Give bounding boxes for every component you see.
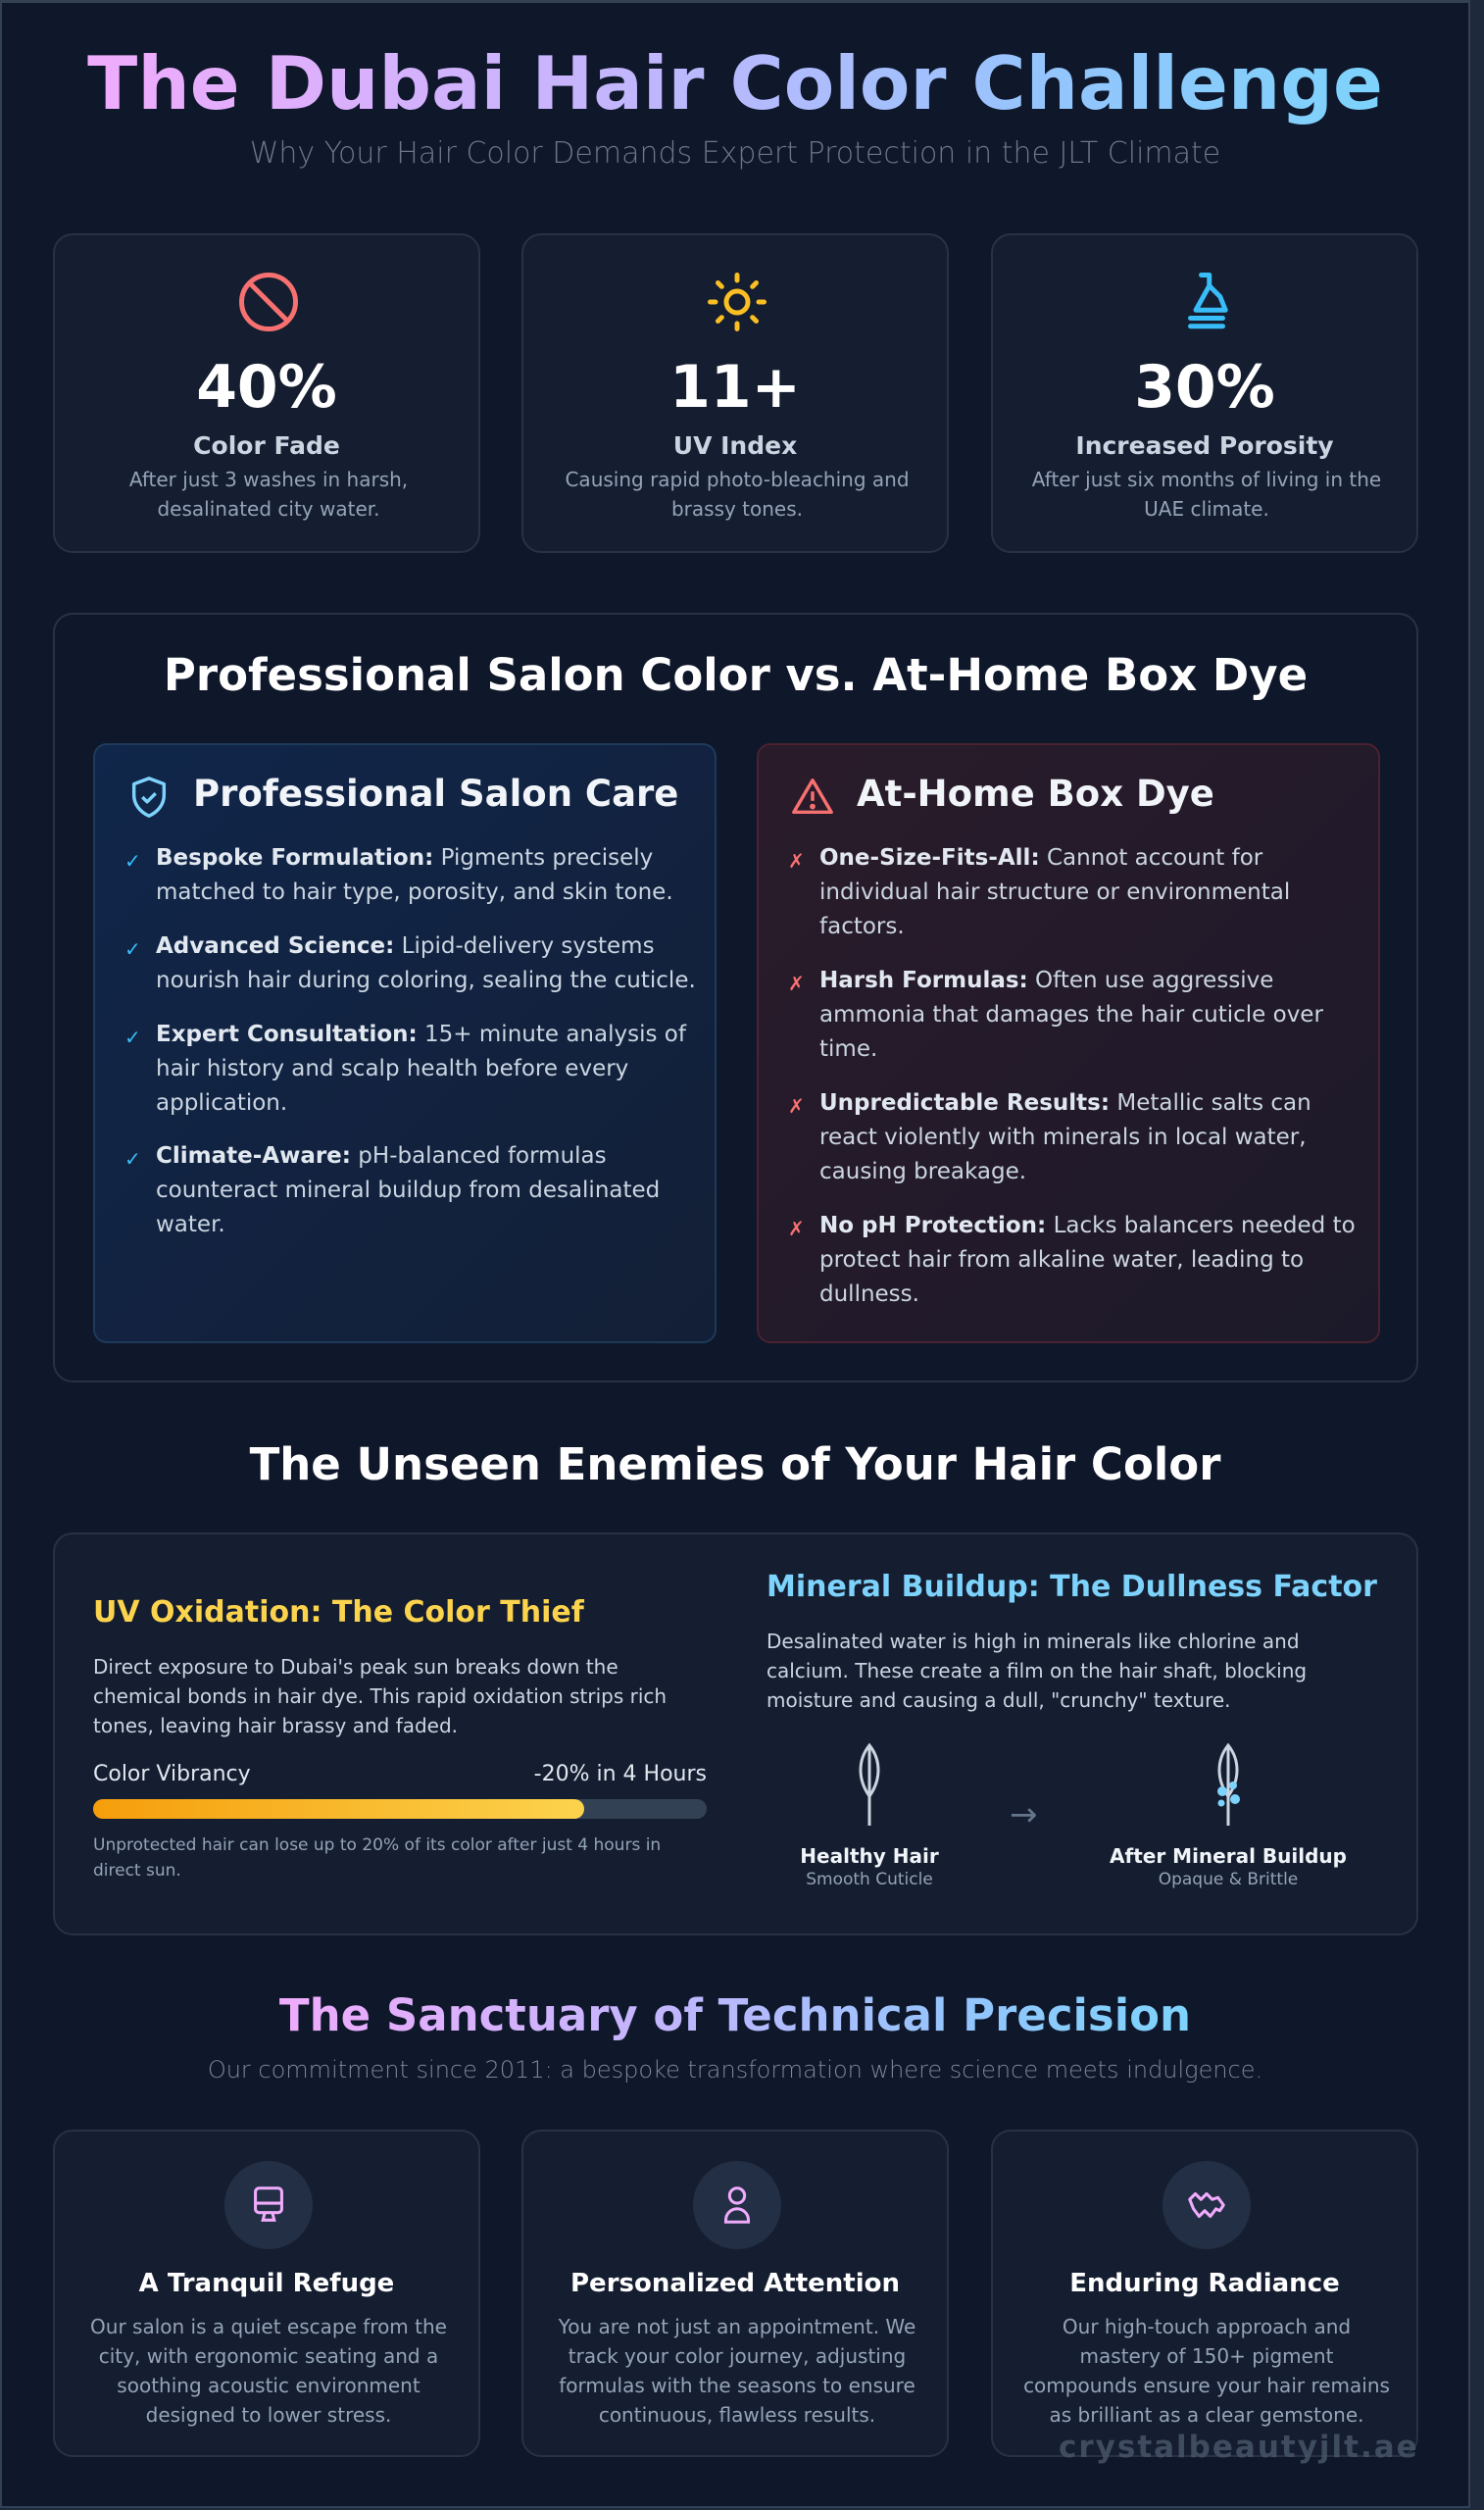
arrow: → <box>1010 1795 1037 1834</box>
panel: comparison <box>53 613 1418 1382</box>
list items: Climate-Aware: pH-balanced formulas counteract mineral buildup from desalinated water. <box>156 1143 660 1237</box>
stat card: porosity <box>991 233 1418 553</box>
label: healthy hair: Smooth Cuticle <box>806 1870 933 1889</box>
card text: You are not just an appointment. We track your color journey, adjusting formulas with the seasons to ensure continuous, flawless results. <box>559 2315 915 2427</box>
note: Unprotected hair can lose up to 20% of its color after just 4 hours in direct sun. <box>93 1835 661 1881</box>
feature card: tranquil refuge <box>53 2130 480 2457</box>
stat description: Causing rapid photo-bleaching and brassy tones. <box>565 468 910 521</box>
watermark: crystalbeautyjlt.ae <box>1059 2430 1419 2465</box>
list items: Bespoke Formulation: Pigments precisely matched to hair type, porosity, and skin tone. <box>156 845 673 905</box>
label: after buildup: After Mineral Buildup <box>1110 1844 1347 1868</box>
list items <box>124 845 696 1237</box>
icon: sun <box>708 273 767 331</box>
stat label: Increased Porosity <box>1075 431 1334 460</box>
sanctuary subtitle: Our commitment since 2011: a bespoke transformation where science meets indulgence. <box>208 2056 1262 2083</box>
stat label: Color Fade <box>193 431 340 460</box>
list items: ✗ <box>788 1094 805 1118</box>
stat number: 40% <box>196 353 337 422</box>
list items: ✓ <box>124 1147 141 1171</box>
heading: Mineral Buildup: The Dullness Factor <box>767 1570 1377 1604</box>
icon: hair after buildup <box>1217 1743 1240 1826</box>
bar chart: color vibrancy <box>93 1762 707 1819</box>
icon: person <box>693 2161 781 2249</box>
title: The Dubai Hair Color Challenge <box>87 40 1383 126</box>
panel: enemies <box>53 1532 1418 1935</box>
panel: box dye <box>757 743 1380 1343</box>
list items: Expert Consultation: 15+ minute analysis of hair history and scalp health before every application. <box>156 1022 686 1116</box>
heading: At-Home Box Dye <box>857 773 1214 815</box>
stat card: uv index <box>521 233 949 553</box>
label: after buildup <box>1110 1844 1347 1889</box>
list items: ✓ <box>124 937 141 961</box>
section heading: enemies: The Unseen Enemies of Your Hair Color <box>250 1438 1220 1490</box>
bar chart: color vibrancy: -20% in 4 Hours <box>534 1762 707 1786</box>
card title: Personalized Attention <box>570 2269 900 2298</box>
icon: warning <box>792 778 833 814</box>
text: Desalinated water is high in minerals like chlorine and calcium. These create a film on the hair shaft, blocking moisture and causing a dull, "crunchy" texture. <box>767 1630 1307 1712</box>
card title: Enduring Radiance <box>1069 2269 1340 2298</box>
list items: ✓ <box>124 1026 141 1049</box>
uv oxidation block <box>93 1595 707 1881</box>
icon: shield <box>131 777 167 818</box>
stat number: 30% <box>1134 353 1275 422</box>
icon: flask <box>1188 273 1228 329</box>
card title: A Tranquil Refuge <box>139 2269 394 2298</box>
icon: prohibited <box>239 273 298 331</box>
icon: healthy hair <box>859 1743 880 1826</box>
section heading: sanctuary: The Sanctuary of Technical Precision <box>279 1989 1191 2041</box>
list items: Harsh Formulas: Often use aggressive ammonia that damages the hair cuticle over time. <box>819 968 1323 1062</box>
stat label: UV Index <box>673 431 797 460</box>
card text: Our salon is a quiet escape from the city, with ergonomic seating and a soothing acoustic environment designed to lower stress. <box>90 2315 447 2427</box>
stat card: color fade <box>53 233 480 553</box>
mineral buildup block <box>767 1570 1377 1889</box>
list items <box>788 845 1356 1307</box>
stat number: 11+ <box>669 353 801 422</box>
list items: ✗ <box>788 972 805 995</box>
list items: ✗ <box>788 1217 805 1240</box>
icon: monitor <box>224 2161 313 2249</box>
feature card: enduring radiance <box>991 2130 1418 2457</box>
subtitle: Why Your Hair Color Demands Expert Protection in the JLT Climate <box>250 136 1220 171</box>
icon: gem <box>1162 2161 1251 2249</box>
comparison heading: Professional Salon Color vs. At-Home Box Dye <box>164 649 1308 701</box>
stat description: After just 3 washes in harsh, desalinated city water. <box>129 468 408 521</box>
list items: ✓ <box>124 849 141 873</box>
label: after buildup: Opaque & Brittle <box>1159 1870 1298 1889</box>
label: healthy hair <box>800 1844 939 1889</box>
list items: Advanced Science: Lipid-delivery systems nourish hair during coloring, sealing the cuticle. <box>156 933 696 993</box>
list items: ✗ <box>788 849 805 873</box>
bar chart: color vibrancy: Color Vibrancy <box>93 1762 251 1786</box>
list items: Unpredictable Results: Metallic salts can react violently with minerals in local water, causing breakage. <box>819 1090 1311 1184</box>
list items: One-Size-Fits-All: Cannot account for individual hair structure or environmental factors. <box>819 845 1290 939</box>
heading: UV Oxidation: The Color Thief <box>93 1595 584 1630</box>
label: healthy hair: Healthy Hair <box>800 1844 939 1868</box>
list items: No pH Protection: Lacks balancers needed to protect hair from alkaline water, leading to dullness. <box>819 1213 1356 1307</box>
card text: Our high-touch approach and mastery of 150+ pigment compounds ensure your hair remains as brilliant as a clear gemstone. <box>1023 2315 1390 2427</box>
feature card: personalized attention <box>521 2130 949 2457</box>
heading: Professional Salon Care <box>193 773 678 815</box>
text: Direct exposure to Dubai's peak sun breaks down the chemical bonds in hair dye. This rapid oxidation strips rich tones, leaving hair brassy and faded. <box>93 1655 667 1737</box>
panel: salon care <box>93 743 717 1343</box>
stat description: After just six months of living in the UAE climate. <box>1032 468 1381 521</box>
